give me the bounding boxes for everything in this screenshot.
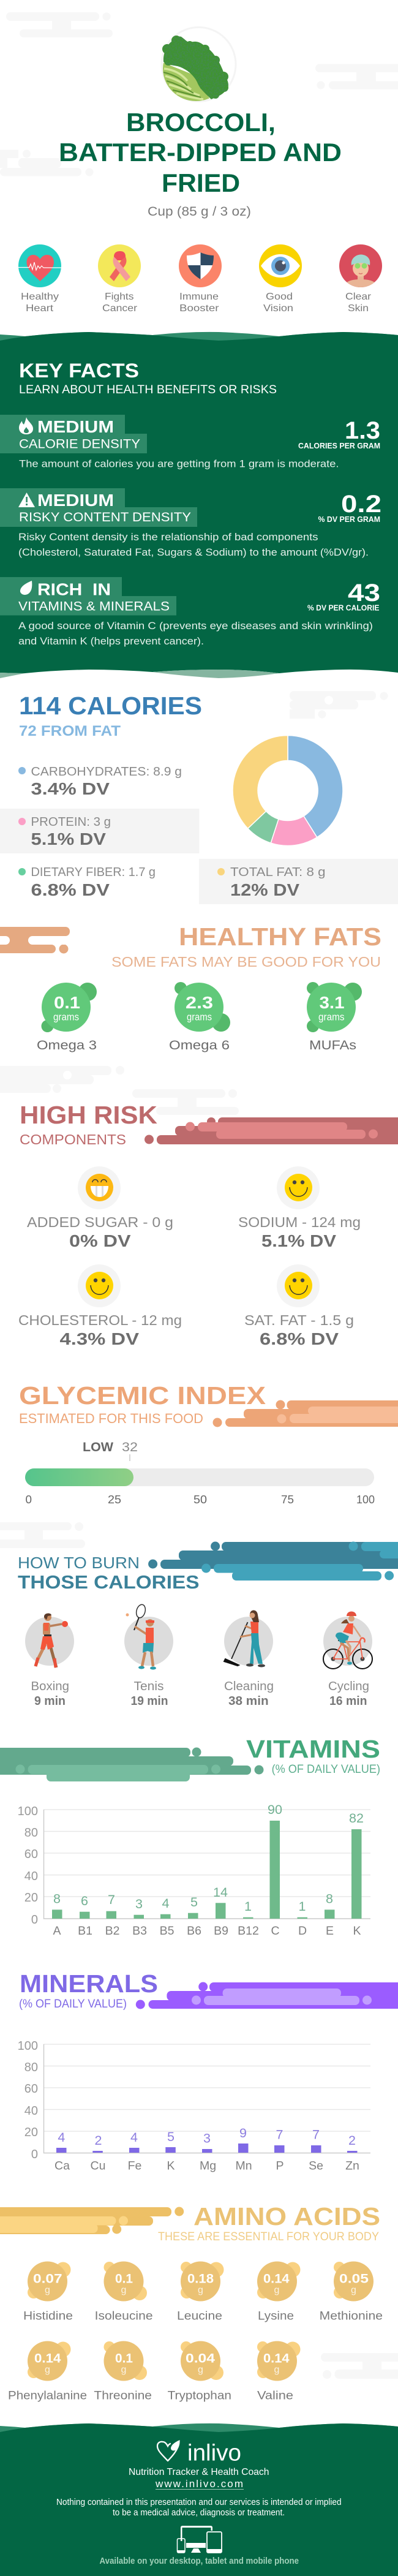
amino: tryptophan: g — [198, 2365, 203, 2375]
bar chart: vitamins: 80 — [24, 1826, 38, 1840]
glycemic gauge — [25, 1440, 375, 1506]
bar chart: minerals: 3 — [203, 2131, 211, 2146]
amino: lysine: 0.14 — [263, 2272, 290, 2286]
benefit: good vision: Vision — [263, 303, 293, 314]
heading: vitamins: VITAMINS — [246, 1735, 380, 1763]
bar chart: minerals: 0 — [31, 2148, 38, 2161]
bar chart: minerals: K — [167, 2159, 175, 2173]
amino: lysine: g — [274, 2285, 279, 2295]
amino: lysine — [257, 2262, 300, 2323]
bubble: omega 6: Omega 6 — [169, 1038, 230, 1052]
bar chart: vitamins: K — [353, 1924, 361, 1938]
fact: rich in vitamins and minerals: 43 — [348, 580, 380, 606]
heading: minerals — [19, 1970, 158, 2011]
bar chart: vitamins: 14 — [213, 1885, 228, 1900]
amino: isoleucine: 0.1 — [115, 2272, 133, 2286]
activity: tennis: Tenis — [133, 1680, 164, 1693]
bar chart: vitamins: 4 — [162, 1896, 170, 1911]
amino: threonine — [94, 2341, 152, 2403]
bar chart: minerals: 9 — [239, 2126, 247, 2140]
amino: tryptophan: 0.04 — [186, 2351, 215, 2366]
benefit: good vision: Good — [266, 292, 293, 302]
legend: carbohydrates: 3.4% DV — [31, 779, 110, 798]
panel: healthy fats — [0, 923, 381, 1052]
disclaimer — [56, 2498, 342, 2518]
glycemic gauge: 50 — [193, 1494, 207, 1506]
bar chart: vitamins: 0 — [31, 1913, 38, 1927]
activity: tennis: 19 min — [131, 1694, 168, 1708]
amino: leucine — [177, 2262, 224, 2323]
amino: isoleucine — [95, 2262, 153, 2323]
legend: total fat — [217, 866, 326, 899]
bar chart: vitamins: D — [298, 1924, 307, 1938]
bubble: omega 6: grams — [187, 1011, 212, 1023]
benefit: clear skin — [339, 244, 382, 314]
amino: tryptophan: Tryptophan — [168, 2390, 231, 2403]
benefit: fights cancer: Cancer — [102, 303, 138, 314]
fact: rich in vitamins and minerals — [0, 577, 380, 647]
fact: risky content density: % DV PER GRAM — [318, 515, 380, 524]
legend: dietary fiber: DIETARY FIBER: 1.7 g — [31, 866, 156, 879]
icon: devices — [178, 2526, 222, 2553]
bar chart: vitamins: B12 — [238, 1924, 259, 1938]
risk item: saturated fat: 6.8% DV — [260, 1329, 339, 1348]
activity: boxing: 9 min — [34, 1694, 66, 1708]
fact: risky content density: 0.2 — [341, 491, 381, 518]
amino: leucine: Leucine — [177, 2310, 222, 2323]
amino: lysine: Lysine — [258, 2310, 294, 2323]
heading: glycemic index: ESTIMATED FOR THIS FOOD — [19, 1411, 203, 1426]
panel: minerals — [18, 1970, 398, 2173]
heading: healthy fats — [111, 923, 381, 970]
disclaimer: Nothing contained in this presentation and our services is intended or implied — [56, 2498, 342, 2507]
amino: leucine: g — [198, 2285, 203, 2295]
bar chart: vitamins: B9 — [214, 1924, 228, 1938]
bar chart: minerals: 80 — [24, 2061, 38, 2074]
bar chart: minerals: Se — [309, 2159, 323, 2173]
benefit: immune booster — [179, 244, 222, 314]
fact: rich in vitamins and minerals: % DV PER CALORIE — [307, 603, 380, 613]
fact: calorie density: CALORIE DENSITY — [19, 436, 140, 451]
risk item: cholesterol: 4.3% DV — [60, 1329, 139, 1348]
benefit: healthy heart — [18, 244, 61, 314]
legend: dietary fiber — [18, 866, 156, 899]
risk item: sodium: SODIUM - 124 mg — [238, 1214, 361, 1230]
amino: threonine: Threonine — [94, 2390, 152, 2403]
logo: inlivo: inlivo — [187, 2441, 241, 2466]
amino: phenylalanine: Phenylalanine — [8, 2390, 87, 2403]
activity: cleaning — [224, 1610, 274, 1708]
decoration: amino bars — [0, 2207, 184, 2234]
legend: carbohydrates: CARBOHYDRATES: 8.9 g — [31, 765, 182, 779]
bar chart: minerals: 5 — [167, 2129, 175, 2144]
heading: key facts: KEY FACTS — [19, 360, 139, 382]
panel: footer — [0, 2423, 398, 2576]
bubble: omega 3: Omega 3 — [37, 1038, 97, 1052]
activity: cleaning: Cleaning — [224, 1680, 274, 1693]
risk item: cholesterol — [18, 1264, 182, 1348]
bar chart: vitamins: B5 — [160, 1924, 175, 1938]
bubble: omega 6: 2.3 — [186, 993, 213, 1012]
heading: high risk — [20, 1101, 157, 1147]
amino: valine: 0.14 — [263, 2351, 290, 2366]
bar chart: minerals: Mg — [200, 2159, 216, 2173]
legend: total fat: TOTAL FAT: 8 g — [230, 866, 326, 879]
panel: high risk components — [18, 1101, 398, 1348]
bar chart: minerals: 4 — [130, 2130, 138, 2145]
heading: amino acids: THESE ARE ESSENTIAL FOR YOUR BODY — [158, 2230, 379, 2243]
glycemic gauge: 100 — [356, 1494, 375, 1506]
legend: carbohydrates — [18, 765, 182, 798]
bubble: omega 6 — [169, 982, 230, 1052]
bar chart: minerals: 7 — [276, 2128, 283, 2142]
highlight bands — [0, 809, 398, 904]
legend: dietary fiber: 6.8% DV — [31, 880, 110, 899]
bar chart: minerals: 100 — [18, 2039, 38, 2053]
bar chart: vitamins: 6 — [81, 1894, 88, 1908]
bar chart: vitamins: 1 — [299, 1899, 306, 1914]
bar chart: vitamins: 20 — [24, 1891, 38, 1905]
bubble: mufas: MUFAs — [309, 1038, 356, 1052]
heading: minerals: (% OF DAILY VALUE) — [19, 1998, 127, 2011]
benefit: fights cancer — [98, 244, 141, 314]
panel: calories — [0, 692, 398, 904]
bar chart: minerals: 20 — [24, 2126, 38, 2139]
glycemic gauge: 25 — [108, 1494, 121, 1506]
risk item: cholesterol: CHOLESTEROL - 12 mg — [18, 1312, 182, 1328]
bar chart: minerals: Zn — [345, 2159, 359, 2173]
activity: boxing — [25, 1614, 74, 1708]
decoration: high risk bars — [145, 1117, 398, 1144]
activity: cycling — [323, 1611, 372, 1708]
heading: healthy fats: SOME FATS MAY BE GOOD FOR YOU — [111, 954, 381, 970]
bubble: mufas: grams — [318, 1011, 344, 1023]
bar chart: vitamins: E — [326, 1924, 334, 1938]
bar chart: vitamins: 90 — [268, 1802, 282, 1817]
amino: phenylalanine — [8, 2341, 87, 2403]
fact: risky content density: RISKY CONTENT DENSITY — [19, 510, 191, 524]
risk item: sodium: 5.1% DV — [261, 1231, 336, 1250]
bar chart: vitamins: B1 — [78, 1924, 92, 1938]
amino: phenylalanine: 0.14 — [34, 2351, 61, 2366]
fact: rich in vitamins and minerals: and Vitamin K (helps prevent cancer). — [18, 635, 204, 647]
fact: calorie density — [0, 415, 380, 469]
amino: valine: Valine — [257, 2390, 293, 2403]
heading: how to burn: THOSE CALORIES — [18, 1571, 200, 1593]
amino: valine — [257, 2341, 300, 2403]
amino: valine: g — [274, 2365, 279, 2375]
amino: histidine: Histidine — [23, 2310, 73, 2323]
title: BATTER-DIPPED AND — [59, 138, 342, 167]
heading: amino acids: AMINO ACIDS — [193, 2202, 380, 2230]
decoration: burn bars — [148, 1541, 398, 1581]
bar chart: minerals: 7 — [312, 2128, 320, 2142]
bar chart: vitamins: C — [271, 1924, 280, 1938]
heading: how to burn: HOW TO BURN — [18, 1554, 140, 1572]
bar chart: minerals: P — [276, 2159, 284, 2173]
glycemic gauge: 32 — [122, 1440, 138, 1454]
heading: minerals: MINERALS — [20, 1970, 158, 1998]
amino: tryptophan — [168, 2341, 231, 2403]
fact: calorie density: The amount of calories you are getting from 1 gram is moderate. — [19, 458, 339, 469]
risk item: added sugar: ADDED SUGAR - 0 g — [27, 1214, 173, 1230]
decoration: glycemic bars — [213, 1400, 398, 1427]
bar chart: minerals — [18, 2039, 370, 2173]
bar chart: vitamins: 1 — [244, 1899, 252, 1914]
fact: risky content density — [0, 488, 381, 558]
heading: high risk: COMPONENTS — [20, 1131, 126, 1147]
glycemic gauge: 0 — [26, 1494, 32, 1506]
decoration: healthy fats bars — [0, 927, 77, 953]
amino: histidine: 0.07 — [33, 2272, 62, 2286]
bar chart: vitamins: 5 — [190, 1895, 198, 1909]
amino: methionine: g — [351, 2285, 356, 2295]
amino: isoleucine: g — [121, 2285, 126, 2295]
amino: isoleucine: Isoleucine — [95, 2310, 153, 2323]
heading: high risk: HIGH RISK — [20, 1101, 157, 1129]
benefit: good vision — [259, 244, 302, 314]
heading: calories: 72 FROM FAT — [19, 723, 121, 739]
risk item: saturated fat: SAT. FAT - 1.5 g — [244, 1312, 354, 1328]
heading: key facts: LEARN ABOUT HEALTH BENEFITS OR RISKS — [19, 383, 277, 396]
bar chart: vitamins: B6 — [187, 1924, 201, 1938]
logo: inlivo — [157, 2440, 241, 2466]
amino: methionine: Methionine — [320, 2310, 383, 2323]
bar chart: minerals: Cu — [91, 2159, 105, 2173]
benefit: clear skin: Skin — [348, 303, 369, 314]
legend: protein: PROTEIN: 3 g — [31, 815, 111, 829]
fact: calorie density: 1.3 — [345, 417, 380, 444]
availability note: Available on your desktop, tablet and mobile phone — [99, 2556, 299, 2566]
amino: histidine — [23, 2262, 73, 2323]
bubble: omega 3 — [37, 983, 97, 1052]
benefit: fights cancer: Fights — [105, 292, 133, 302]
amino: methionine: 0.05 — [339, 2272, 369, 2286]
bar chart: minerals: 2 — [95, 2133, 102, 2148]
benefit: immune booster: Booster — [179, 303, 219, 314]
fact: calorie density: MEDIUM — [37, 417, 114, 436]
serving size: Cup (85 g / 3 oz) — [148, 205, 251, 219]
heading: amino acids — [158, 2202, 380, 2243]
bar chart: vitamins: 100 — [18, 1805, 38, 1818]
activity: cleaning: 38 min — [228, 1694, 269, 1708]
risk item: saturated fat — [244, 1264, 354, 1348]
benefit: healthy heart: Heart — [26, 303, 54, 314]
panel: amino acids — [0, 2202, 383, 2403]
fact: calorie density: CALORIES PER GRAM — [298, 441, 380, 450]
tagline: Nutrition Tracker & Health Coach — [129, 2467, 269, 2477]
panel: glycemic index — [19, 1381, 398, 1506]
bar chart: vitamins: 7 — [108, 1892, 115, 1907]
benefit: healthy heart: Healthy — [21, 292, 59, 302]
benefit: immune booster: Immune — [179, 292, 219, 302]
fact: risky content density: (Cholesterol, Saturated Fat, Sugars & Sodium) to the amount (%DV/gr). — [18, 546, 369, 558]
bar chart: vitamins: B2 — [105, 1924, 119, 1938]
glycemic gauge: 75 — [281, 1494, 294, 1506]
amino: threonine: 0.1 — [115, 2351, 133, 2366]
bar chart: minerals: Fe — [128, 2159, 141, 2173]
donut chart — [233, 735, 343, 845]
bar chart: vitamins: 40 — [24, 1870, 38, 1883]
bar chart: minerals: 2 — [348, 2133, 356, 2148]
fact: rich in vitamins and minerals: A good source of Vitamin C (prevents eye diseases and skin wrinkling) — [18, 620, 373, 632]
bubble: mufas: 3.1 — [320, 993, 344, 1012]
fact: risky content density: Risky Content density is the relationship of bad components — [18, 531, 318, 543]
bar chart: vitamins: 8 — [326, 1892, 333, 1906]
bar chart: vitamins: 3 — [135, 1897, 143, 1911]
amino: threonine: g — [121, 2365, 126, 2375]
fact: rich in vitamins and minerals: RICH IN — [37, 580, 111, 599]
bar chart: vitamins: B3 — [132, 1924, 147, 1938]
bar chart: vitamins: 60 — [24, 1848, 38, 1861]
bar chart: minerals: 4 — [58, 2130, 65, 2145]
bubble: omega 3: 0.1 — [54, 993, 80, 1012]
bubble: mufas — [307, 982, 362, 1052]
bar chart: minerals: 40 — [24, 2104, 38, 2118]
bubble: omega 3: grams — [53, 1011, 79, 1023]
heading: key facts — [19, 360, 277, 396]
glycemic gauge: LOW — [83, 1440, 114, 1454]
fact: rich in vitamins and minerals: VITAMINS & MINERALS — [18, 599, 170, 614]
legend: protein — [18, 815, 111, 848]
bar chart: vitamins: 82 — [349, 1811, 364, 1826]
website link: www.inlivo.com — [155, 2478, 243, 2490]
heading: vitamins: (% OF DAILY VALUE) — [272, 1763, 380, 1776]
bar chart: minerals: 60 — [24, 2082, 38, 2096]
heading: healthy fats: HEALTHY FATS — [179, 923, 381, 951]
title — [59, 108, 342, 197]
panel: key facts — [0, 332, 398, 678]
decoration: minerals bars — [136, 1982, 398, 2009]
panel: vitamins — [0, 1735, 380, 1938]
title: BROCCOLI, — [126, 108, 276, 137]
legend: total fat: 12% DV — [230, 880, 299, 899]
activity: boxing: Boxing — [31, 1680, 69, 1693]
risk item: added sugar: 0% DV — [69, 1231, 131, 1250]
amino: phenylalanine: g — [45, 2365, 50, 2375]
heading: glycemic index — [19, 1381, 266, 1426]
activity: cycling: Cycling — [328, 1680, 369, 1693]
panel: how to burn those calories — [18, 1541, 398, 1708]
legend: protein: 5.1% DV — [31, 829, 106, 848]
heading: calories: 114 CALORIES — [19, 692, 202, 720]
benefit: clear skin: Clear — [345, 292, 372, 302]
hero: broccoli image in ring — [160, 27, 236, 104]
disclaimer: to be a medical advice, diagnosis or treatment. — [113, 2508, 285, 2518]
heading: glycemic index: GLYCEMIC INDEX — [19, 1381, 266, 1410]
activity: tennis — [124, 1604, 173, 1708]
activity: cycling: 16 min — [329, 1694, 367, 1708]
amino: methionine — [320, 2262, 383, 2323]
heading: vitamins — [246, 1735, 380, 1776]
bar chart: vitamins: 8 — [53, 1892, 61, 1906]
risk item: sodium — [238, 1166, 361, 1250]
decoration: vitamins bars — [0, 1747, 263, 1781]
bar chart: vitamins: A — [53, 1924, 61, 1938]
fact: risky content density: MEDIUM — [37, 491, 114, 510]
risk item: added sugar — [27, 1166, 173, 1250]
bar chart: minerals: Ca — [54, 2159, 70, 2173]
bar chart: vitamins — [18, 1802, 370, 1938]
heading: how to burn — [18, 1554, 200, 1593]
amino: leucine: 0.18 — [187, 2272, 214, 2286]
bar chart: minerals: Mn — [235, 2159, 252, 2173]
amino: histidine: g — [45, 2285, 50, 2295]
heading: calories — [19, 692, 202, 739]
title: FRIED — [162, 168, 240, 197]
